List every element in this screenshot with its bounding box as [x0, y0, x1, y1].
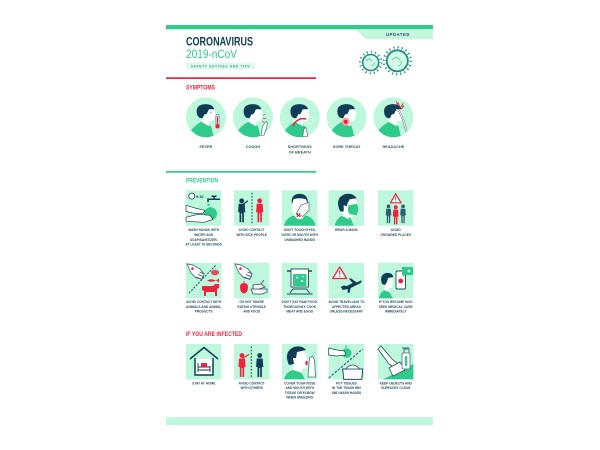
green divider	[166, 171, 316, 173]
top banner bar	[166, 25, 433, 29]
title: CORONAVIRUS	[186, 37, 253, 49]
caption: MEAT AND EGGS	[286, 310, 313, 314]
caption: AND MOUTH WITH	[285, 386, 315, 390]
caption: WEAR A MASK	[335, 228, 359, 232]
label: cough: COUGH	[246, 145, 260, 149]
caption: IMMEDIATELY	[385, 310, 407, 314]
subtitle: 2019-nCoV	[186, 49, 237, 61]
tile: keep surfaces clean	[378, 344, 413, 390]
caption: AVOID CONTACT	[239, 228, 265, 232]
tile: cover nose and mouth	[282, 344, 317, 400]
heading: prevention: PREVENTION	[186, 177, 218, 184]
caption: WATER AND	[194, 233, 214, 237]
updated tab: UPDATED	[386, 32, 410, 37]
icon: virus particles	[360, 47, 411, 75]
caption: IN THE TRASH BIN	[332, 386, 361, 390]
caption: SOAP/SANITIZER,	[190, 238, 218, 242]
tile: do not share utensils	[234, 263, 269, 314]
caption: UNWASHED HANDS	[284, 238, 315, 242]
caption: AVOID	[391, 228, 401, 232]
caption: DON'T EAT RAW FOOD,	[282, 300, 318, 304]
tile: avoid contact with animals	[186, 263, 222, 314]
label: fever: FEVER	[200, 145, 213, 149]
symptom: cough	[233, 97, 273, 149]
caption: AND WASH HANDS	[332, 391, 361, 395]
symptom: shortness of breath	[280, 97, 320, 154]
caption: AVOID CONTACT	[239, 381, 265, 385]
caption: SEEK MEDICAL CARE	[379, 305, 413, 309]
caption: PUT TISSUES	[336, 381, 357, 385]
tile: wear a mask	[329, 190, 364, 232]
caption: AVOID TRAVELLING TO	[328, 300, 365, 304]
caption: AFFECTED AREAS	[332, 305, 361, 309]
caption: WHEN SNEEZING	[286, 396, 314, 400]
tile: cook thoroughly	[282, 263, 318, 314]
caption: SURFACES CLEAN	[381, 386, 411, 390]
tile: wash hands	[185, 190, 222, 247]
heading: symptoms: SYMPTOMS	[186, 84, 216, 91]
caption: IF YOU BECOME SICK	[379, 300, 413, 304]
tile: put tissues in the bin	[329, 344, 364, 395]
label: shortness of breath: SHORTNESS	[288, 145, 312, 149]
label: shortness of breath: OF BREATH	[289, 150, 311, 154]
caption: WASH HANDS WITH	[188, 228, 220, 232]
caption: AT LEAST 20 SECONDS	[185, 243, 222, 247]
safety advice pill: SAFETY ADVICES AND TIPS	[191, 64, 250, 68]
caption: WITH SICK PEOPLE	[236, 233, 267, 237]
caption: TISSUE OR ELBOW	[285, 391, 315, 395]
symptom: fever	[186, 97, 226, 149]
caption: DO NOT SHARE	[239, 300, 264, 304]
tile: do not touch face	[282, 190, 319, 242]
caption: NOSE OR MOUTH WITH	[282, 233, 319, 237]
label: sore throat: SORE THROAT	[333, 145, 361, 149]
tile: avoid contact with sick people	[234, 190, 269, 237]
tile: avoid travelling	[328, 263, 365, 314]
caption: WITH OTHERS	[241, 386, 263, 390]
caption: UNLESS NECESSARY	[330, 310, 364, 314]
symptom: headache	[373, 97, 413, 149]
tile: seek medical care	[378, 263, 413, 314]
caption: THOROUGHLY COOK	[283, 305, 317, 309]
label: headache: HEADACHE	[382, 145, 405, 149]
caption: EATING UTENSILS	[237, 305, 266, 309]
bottom bar	[166, 417, 433, 425]
caption: DON'T TOUCH EYES,	[284, 228, 316, 232]
safety advice pill	[186, 63, 255, 69]
heading: if you are infected: IF YOU ARE INFECTED	[186, 331, 242, 338]
caption: PRODUCTS	[195, 310, 213, 314]
tile: avoid contact with others	[234, 344, 269, 390]
caption: STAY AT HOME	[192, 381, 215, 385]
tile: stay at home	[186, 344, 221, 385]
caption: KEEP OBJECTS AND	[380, 381, 413, 385]
caption: ANIMALS AND ANIMAL	[186, 305, 221, 309]
caption: AVOID CONTACT WITH	[186, 300, 222, 304]
caption: CROWDED PLACES	[380, 233, 411, 237]
symptom: sore throat	[327, 97, 367, 149]
tile: avoid crowded places	[378, 190, 413, 237]
red divider	[166, 77, 316, 79]
caption: AND FOOD	[243, 310, 261, 314]
updated tab	[355, 29, 433, 39]
tile: wash hands: 0:30	[196, 195, 204, 199]
caption: COVER YOUR NOSE	[284, 381, 315, 385]
